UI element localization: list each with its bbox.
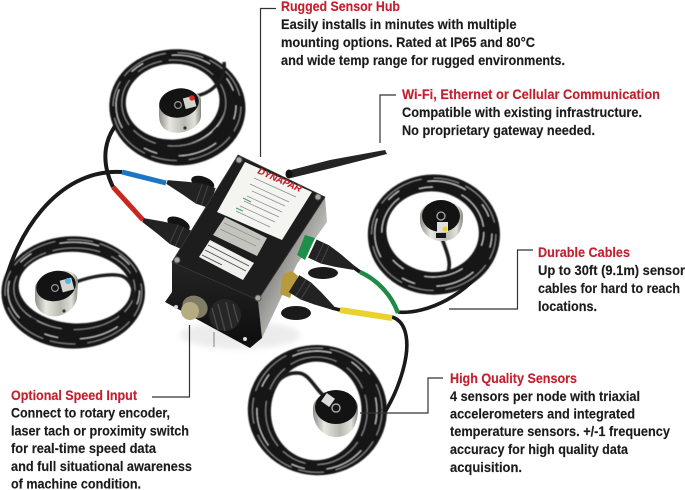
cable: bottom-left sensor to blue sleeve — [5, 172, 166, 285]
coil: bottom-left sensor cable — [4, 239, 142, 346]
text block: high quality sensors: acquisition. — [450, 459, 522, 475]
leader line: rugged sensor hub — [260, 8, 276, 157]
sensor: bottom — [313, 390, 358, 437]
main product label — [217, 162, 312, 240]
cable: bottom sensor to yellow sleeve — [332, 308, 407, 412]
text block: rugged sensor hub: mounting options. Rated at IP65 and 80°C — [281, 34, 535, 50]
corner screws — [174, 157, 321, 301]
coil: bottom sensor cable — [248, 345, 387, 476]
text block: high quality sensors: accuracy for high quality data — [450, 441, 628, 457]
text block: high quality sensors: High Quality Sensors — [450, 370, 577, 386]
rugged sensor hub enclosure — [165, 155, 327, 349]
leader line: speed input — [152, 325, 190, 397]
text block: high quality sensors: accelerometers and integrated — [450, 406, 635, 422]
cable: top-left sensor to red sleeve — [105, 118, 143, 220]
text block: optional speed input — [11, 387, 192, 490]
text block: rugged sensor hub — [281, 0, 565, 68]
text block: high quality sensors: 4 sensors per node with triaxial — [450, 388, 640, 404]
connector: green cable with green ring — [297, 235, 358, 279]
text block: durable cables: locations. — [538, 298, 597, 314]
text block: optional speed input: laser tach or proximity switch — [11, 422, 189, 438]
round metal connector — [179, 292, 211, 322]
hub top lid — [172, 155, 325, 300]
secondary grey label — [213, 217, 267, 256]
text block: communication: Wi-Fi, Ethernet or Cellular Communication — [402, 86, 660, 102]
main product label: DYNAPAR — [256, 166, 304, 194]
text block: optional speed input: Connect to rotary encoder, — [11, 404, 170, 420]
text block: rugged sensor hub: Easily installs in minutes with multiple — [281, 16, 517, 32]
leader line: communication — [380, 95, 396, 143]
hub side face right — [258, 197, 327, 338]
serial number label — [199, 240, 254, 280]
sensor: right, yellow marker — [420, 200, 463, 241]
text block: optional speed input: Optional Speed Input — [11, 387, 137, 403]
text block: communication — [402, 86, 660, 138]
text block: durable cables — [538, 244, 685, 314]
text block: optional speed input: and full situational awareness — [11, 458, 192, 474]
sensor: top-left, red marker — [157, 85, 201, 133]
coil: top-left sensor cable — [110, 48, 245, 166]
connector: red cable — [139, 204, 194, 250]
cable: right sensor to green sleeve — [353, 258, 490, 313]
connector: yellow cable with yellow ring — [280, 271, 338, 320]
black knob connector with key chain — [209, 299, 241, 347]
hub front face and flange — [165, 262, 262, 348]
leader line: high quality sensors — [360, 378, 443, 413]
text block: high quality sensors — [450, 370, 670, 475]
leader line: durable cables — [449, 250, 533, 309]
antenna — [286, 150, 387, 178]
text block: durable cables: Durable Cables — [538, 244, 630, 260]
text block: high quality sensors: temperature sensors. +/-1 frequency — [450, 423, 670, 439]
text block: communication: Compatible with existing infrastructure. — [402, 104, 642, 120]
text block: communication: No proprietary gateway needed. — [402, 122, 595, 138]
coil: right sensor cable — [369, 175, 498, 293]
text block: rugged sensor hub: and wide temp range for rugged environments. — [281, 52, 565, 68]
connector: blue cable — [163, 166, 218, 208]
mounting tab holes — [174, 305, 247, 341]
text block: optional speed input: for real-time speed data — [11, 440, 156, 456]
sensor: bottom-left, cyan marker — [33, 267, 79, 316]
